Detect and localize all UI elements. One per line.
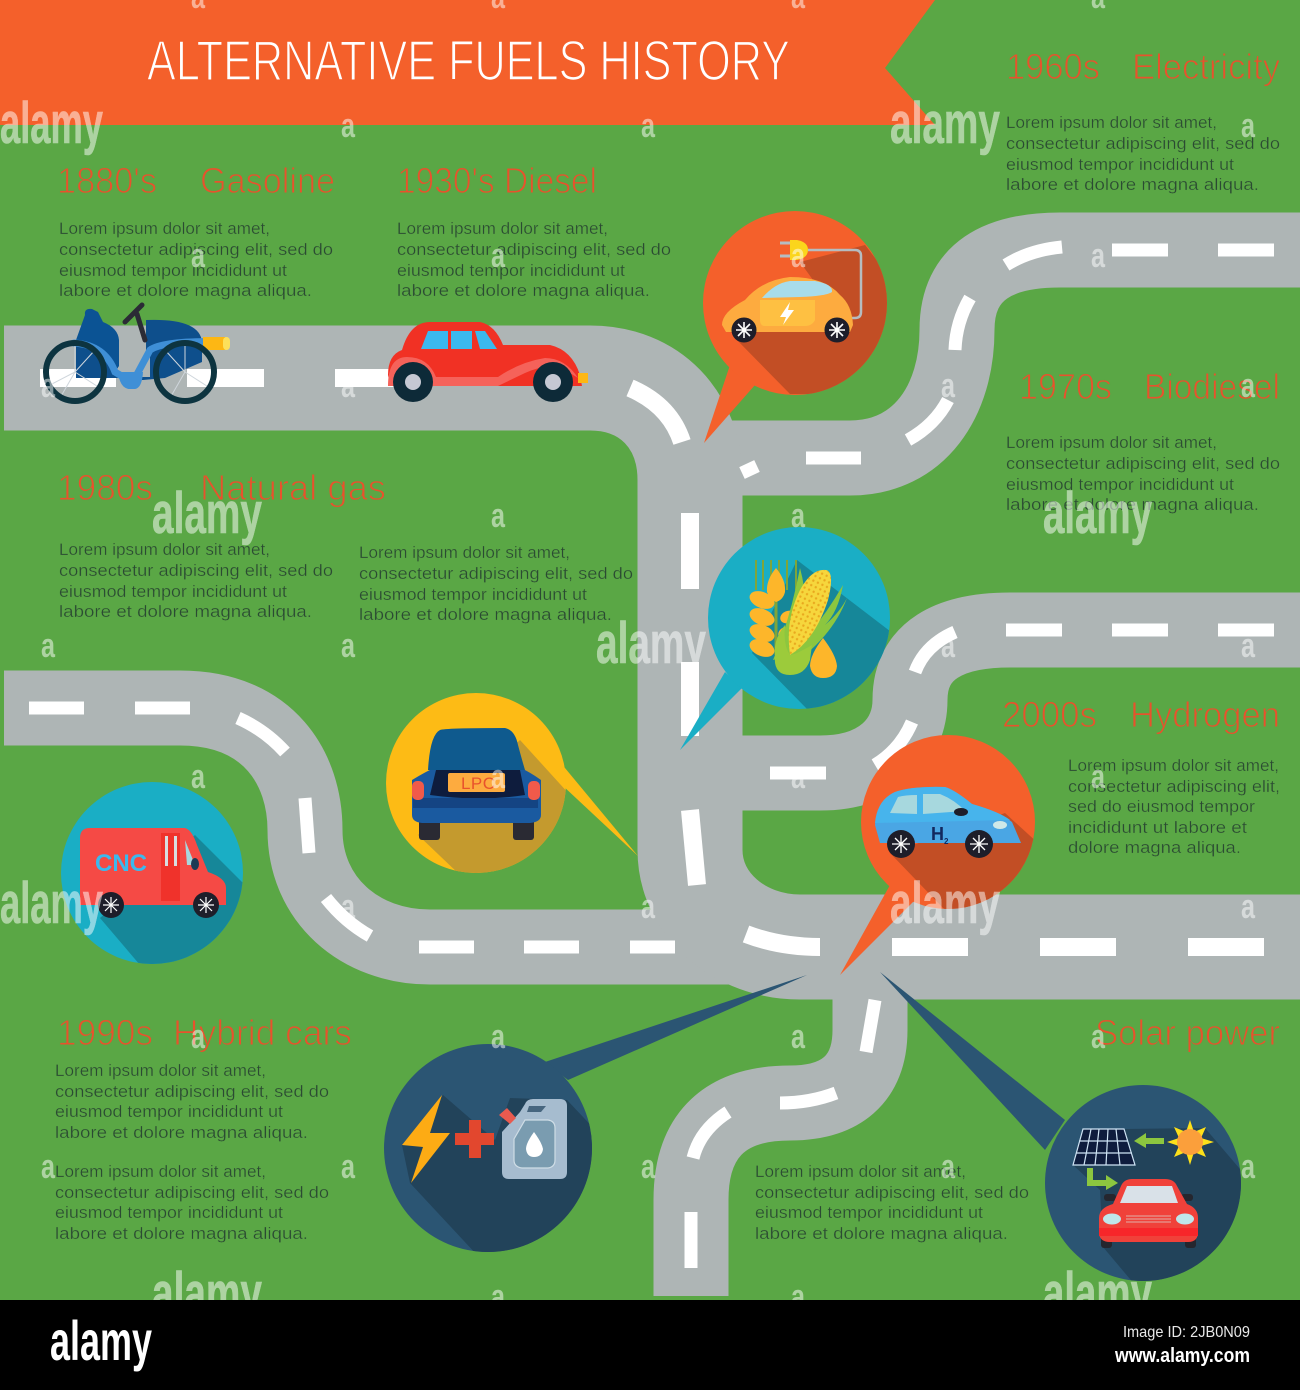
icon: vintage motor carriage [46, 305, 230, 401]
text: natural gas 1: eiusmod tempor incididunt ut [59, 582, 287, 601]
heading: 1990s Hybrid cars: Hybrid cars [173, 1012, 352, 1053]
text: hybrid 1 [55, 1061, 329, 1142]
text: natural gas 2: labore et dolore magna aliqua. [359, 605, 612, 624]
text: solar: labore et dolore magna aliqua. [755, 1224, 1008, 1243]
text: hybrid 1: eiusmod tempor incididunt ut [55, 1102, 283, 1121]
watermarks: alamy [1043, 481, 1152, 546]
text: gasoline: Lorem ipsum dolor sit amet, [59, 219, 270, 238]
text: diesel: labore et dolore magna aliqua. [397, 281, 650, 300]
text: electricity: eiusmod tempor incididunt ut [1006, 155, 1234, 174]
heading: 1960s Electricity: 1960s [1006, 46, 1100, 87]
heading: 1970s Biodiesel: 1970s [1019, 366, 1112, 407]
watermarks: alamy [152, 481, 262, 546]
text: electricity: Lorem ipsum dolor sit amet, [1006, 113, 1217, 132]
text: natural gas 2: Lorem ipsum dolor sit amet, [359, 543, 570, 562]
watermarks: a [491, 758, 506, 796]
text: solar [755, 1162, 1029, 1243]
icon: car with open trunk: LPC [461, 774, 495, 793]
watermarks: a [1091, 758, 1106, 796]
road network [4, 247, 1300, 1296]
text: gasoline: consectetur adipiscing elit, sed do [59, 240, 333, 259]
footer logo: alamy [50, 1309, 152, 1372]
title banner [0, 0, 935, 125]
text: hydrogen: Lorem ipsum dolor sit amet, [1068, 756, 1279, 775]
callout: electricity [703, 211, 900, 443]
watermarks: a [1241, 888, 1256, 926]
heading: 1970s Biodiesel [1019, 366, 1280, 407]
icon: CNC van: CNC [95, 850, 147, 877]
text: electricity: labore et dolore magna aliqua. [1006, 175, 1259, 194]
text: diesel: eiusmod tempor incididunt ut [397, 261, 625, 280]
text: gasoline: eiusmod tempor incididunt ut [59, 261, 287, 280]
watermarks: a [491, 1018, 506, 1056]
icon: hydrogen car [875, 787, 1021, 858]
watermarks: alamy [890, 91, 1000, 156]
text: biodiesel [1006, 433, 1280, 514]
text: solar: eiusmod tempor incididunt ut [755, 1203, 983, 1222]
watermarks: a [191, 237, 206, 275]
callout: hydrogen [840, 735, 1040, 975]
watermarks: a [1091, 1018, 1106, 1056]
heading: 2000s Hydrogen: Hydrogen [1130, 694, 1280, 735]
text: hybrid 2: consectetur adipiscing elit, sed do [55, 1183, 329, 1202]
watermarks: alamy [1043, 1261, 1152, 1326]
watermarks: a [341, 107, 356, 145]
watermarks: a [1241, 367, 1256, 405]
text: natural gas 2 [359, 543, 633, 624]
text: biodiesel: labore et dolore magna aliqua. [1006, 495, 1259, 514]
heading: 1980s Natural gas [57, 467, 386, 508]
watermarks: a [41, 1148, 56, 1186]
watermarks: a [1091, 237, 1106, 275]
text: electricity: consectetur adipiscing elit, sed do [1006, 134, 1280, 153]
heading: 1880's Gasoline: 1880's [57, 160, 157, 201]
icon: electric car [722, 240, 861, 342]
text: natural gas 1: consectetur adipiscing elit, sed do [59, 561, 333, 580]
heading: 1960s Electricity: Electricity [1132, 46, 1280, 87]
icon: red vintage car [388, 322, 588, 402]
heading: 2000s Hydrogen: 2000s [1002, 694, 1097, 735]
watermarks: a [791, 237, 806, 275]
icon: hydrogen car: H [931, 824, 944, 844]
text: gasoline [59, 219, 333, 300]
callout: biodiesel [680, 527, 895, 750]
text: natural gas 2: eiusmod tempor incididunt ut [359, 585, 587, 604]
watermarks: alamy [0, 871, 103, 936]
text: diesel: consectetur adipiscing elit, sed do [397, 240, 671, 259]
watermarks: a [791, 497, 806, 535]
heading: 1960s Electricity [1006, 46, 1280, 87]
text: hydrogen: consectetur adipiscing elit, [1068, 777, 1280, 796]
road dashes [29, 247, 1274, 1268]
watermarks: a [641, 888, 656, 926]
text: natural gas 2: consectetur adipiscing elit, sed do [359, 564, 633, 583]
watermarks: a [491, 237, 506, 275]
heading: 1880's Gasoline [57, 160, 335, 201]
text: hydrogen: dolore magna aliqua. [1068, 838, 1241, 857]
text: hydrogen [1068, 756, 1280, 857]
watermarks: a [641, 107, 656, 145]
text: biodiesel: Lorem ipsum dolor sit amet, [1006, 433, 1217, 452]
heading: Solar power: Solar power [1095, 1012, 1280, 1053]
watermarks: a [1241, 627, 1256, 665]
watermarks: a [341, 627, 356, 665]
watermarks: a [341, 888, 356, 926]
text: hybrid 1: consectetur adipiscing elit, sed do [55, 1082, 329, 1101]
text: hybrid 2: eiusmod tempor incididunt ut [55, 1203, 283, 1222]
watermarks: alamy [152, 1261, 262, 1326]
text: biodiesel: eiusmod tempor incididunt ut [1006, 475, 1234, 494]
text: natural gas 1: labore et dolore magna aliqua. [59, 602, 312, 621]
callout: LPG [386, 693, 638, 875]
text: electricity [1006, 113, 1280, 194]
heading: 1980s Natural gas: Natural gas [200, 467, 386, 508]
text: solar: Lorem ipsum dolor sit amet, [755, 1162, 966, 1181]
icon: solar panel, sun and car [1073, 1120, 1214, 1248]
watermarks: alamy [890, 871, 1000, 936]
watermarks: a [641, 1148, 656, 1186]
icon: car with open trunk [412, 728, 541, 840]
icon: CNC van [80, 828, 226, 918]
watermarks: alamy [596, 611, 706, 676]
heading: 1990s Hybrid cars [57, 1012, 352, 1053]
callout: solar [880, 972, 1245, 1285]
watermarks: a [791, 758, 806, 796]
heading: 2000s Hydrogen [1002, 694, 1280, 735]
watermarks: a [941, 627, 956, 665]
text: natural gas 1 [59, 540, 333, 621]
text: hybrid 2: Lorem ipsum dolor sit amet, [55, 1162, 266, 1181]
watermarks: a [1241, 1148, 1256, 1186]
callout: CNC [61, 782, 245, 965]
text: hydrogen: incididunt ut labore et [1068, 818, 1247, 837]
icon: bolt plus jerrycan [402, 1095, 567, 1183]
footer bar [0, 1300, 1300, 1390]
heading: 1930's Diesel: 1930's Diesel [397, 160, 597, 201]
heading: 1880's Gasoline: Gasoline [200, 160, 335, 201]
text: gasoline: labore et dolore magna aliqua. [59, 281, 312, 300]
watermarks: a [191, 1018, 206, 1056]
text: diesel [397, 219, 671, 300]
icon: hydrogen car: 2 [944, 837, 949, 846]
watermarks: a [41, 627, 56, 665]
watermarks: a [791, 1278, 806, 1316]
heading: 1970s Biodiesel: Biodiesel [1144, 366, 1280, 407]
text: hybrid 2 [55, 1162, 329, 1243]
watermarks: a [191, 758, 206, 796]
watermarks: a [491, 497, 506, 535]
watermarks: a [491, 1278, 506, 1316]
watermarks: a [341, 367, 356, 405]
text: diesel: Lorem ipsum dolor sit amet, [397, 219, 608, 238]
text: hybrid 1: labore et dolore magna aliqua. [55, 1123, 308, 1142]
title: ALTERNATIVE FUELS HISTORY [147, 29, 790, 93]
icon: wheat, corn and oil drop [747, 560, 847, 678]
heading: 1990s Hybrid cars: 1990s [57, 1012, 153, 1053]
watermarks: a [1241, 107, 1256, 145]
watermarks: a [941, 1148, 956, 1186]
watermarks: a [941, 367, 956, 405]
footer image id: Image ID: 2JB0N09 [1123, 1324, 1250, 1341]
text: natural gas 1: Lorem ipsum dolor sit amet, [59, 540, 270, 559]
text: hydrogen: sed do eiusmod tempor [1068, 797, 1255, 816]
heading: 1980s Natural gas: 1980s [57, 467, 153, 508]
watermarks: a [341, 1148, 356, 1186]
text: solar: consectetur adipiscing elit, sed do [755, 1183, 1029, 1202]
callout: hybrid [384, 975, 807, 1255]
text: biodiesel: consectetur adipiscing elit, sed do [1006, 454, 1280, 473]
watermarks: alamy [0, 91, 103, 156]
footer url: www.alamy.com [1114, 1345, 1250, 1367]
text: hybrid 1: Lorem ipsum dolor sit amet, [55, 1061, 266, 1080]
watermarks: a [791, 1018, 806, 1056]
text: hybrid 2: labore et dolore magna aliqua. [55, 1224, 308, 1243]
watermarks: a [41, 367, 56, 405]
